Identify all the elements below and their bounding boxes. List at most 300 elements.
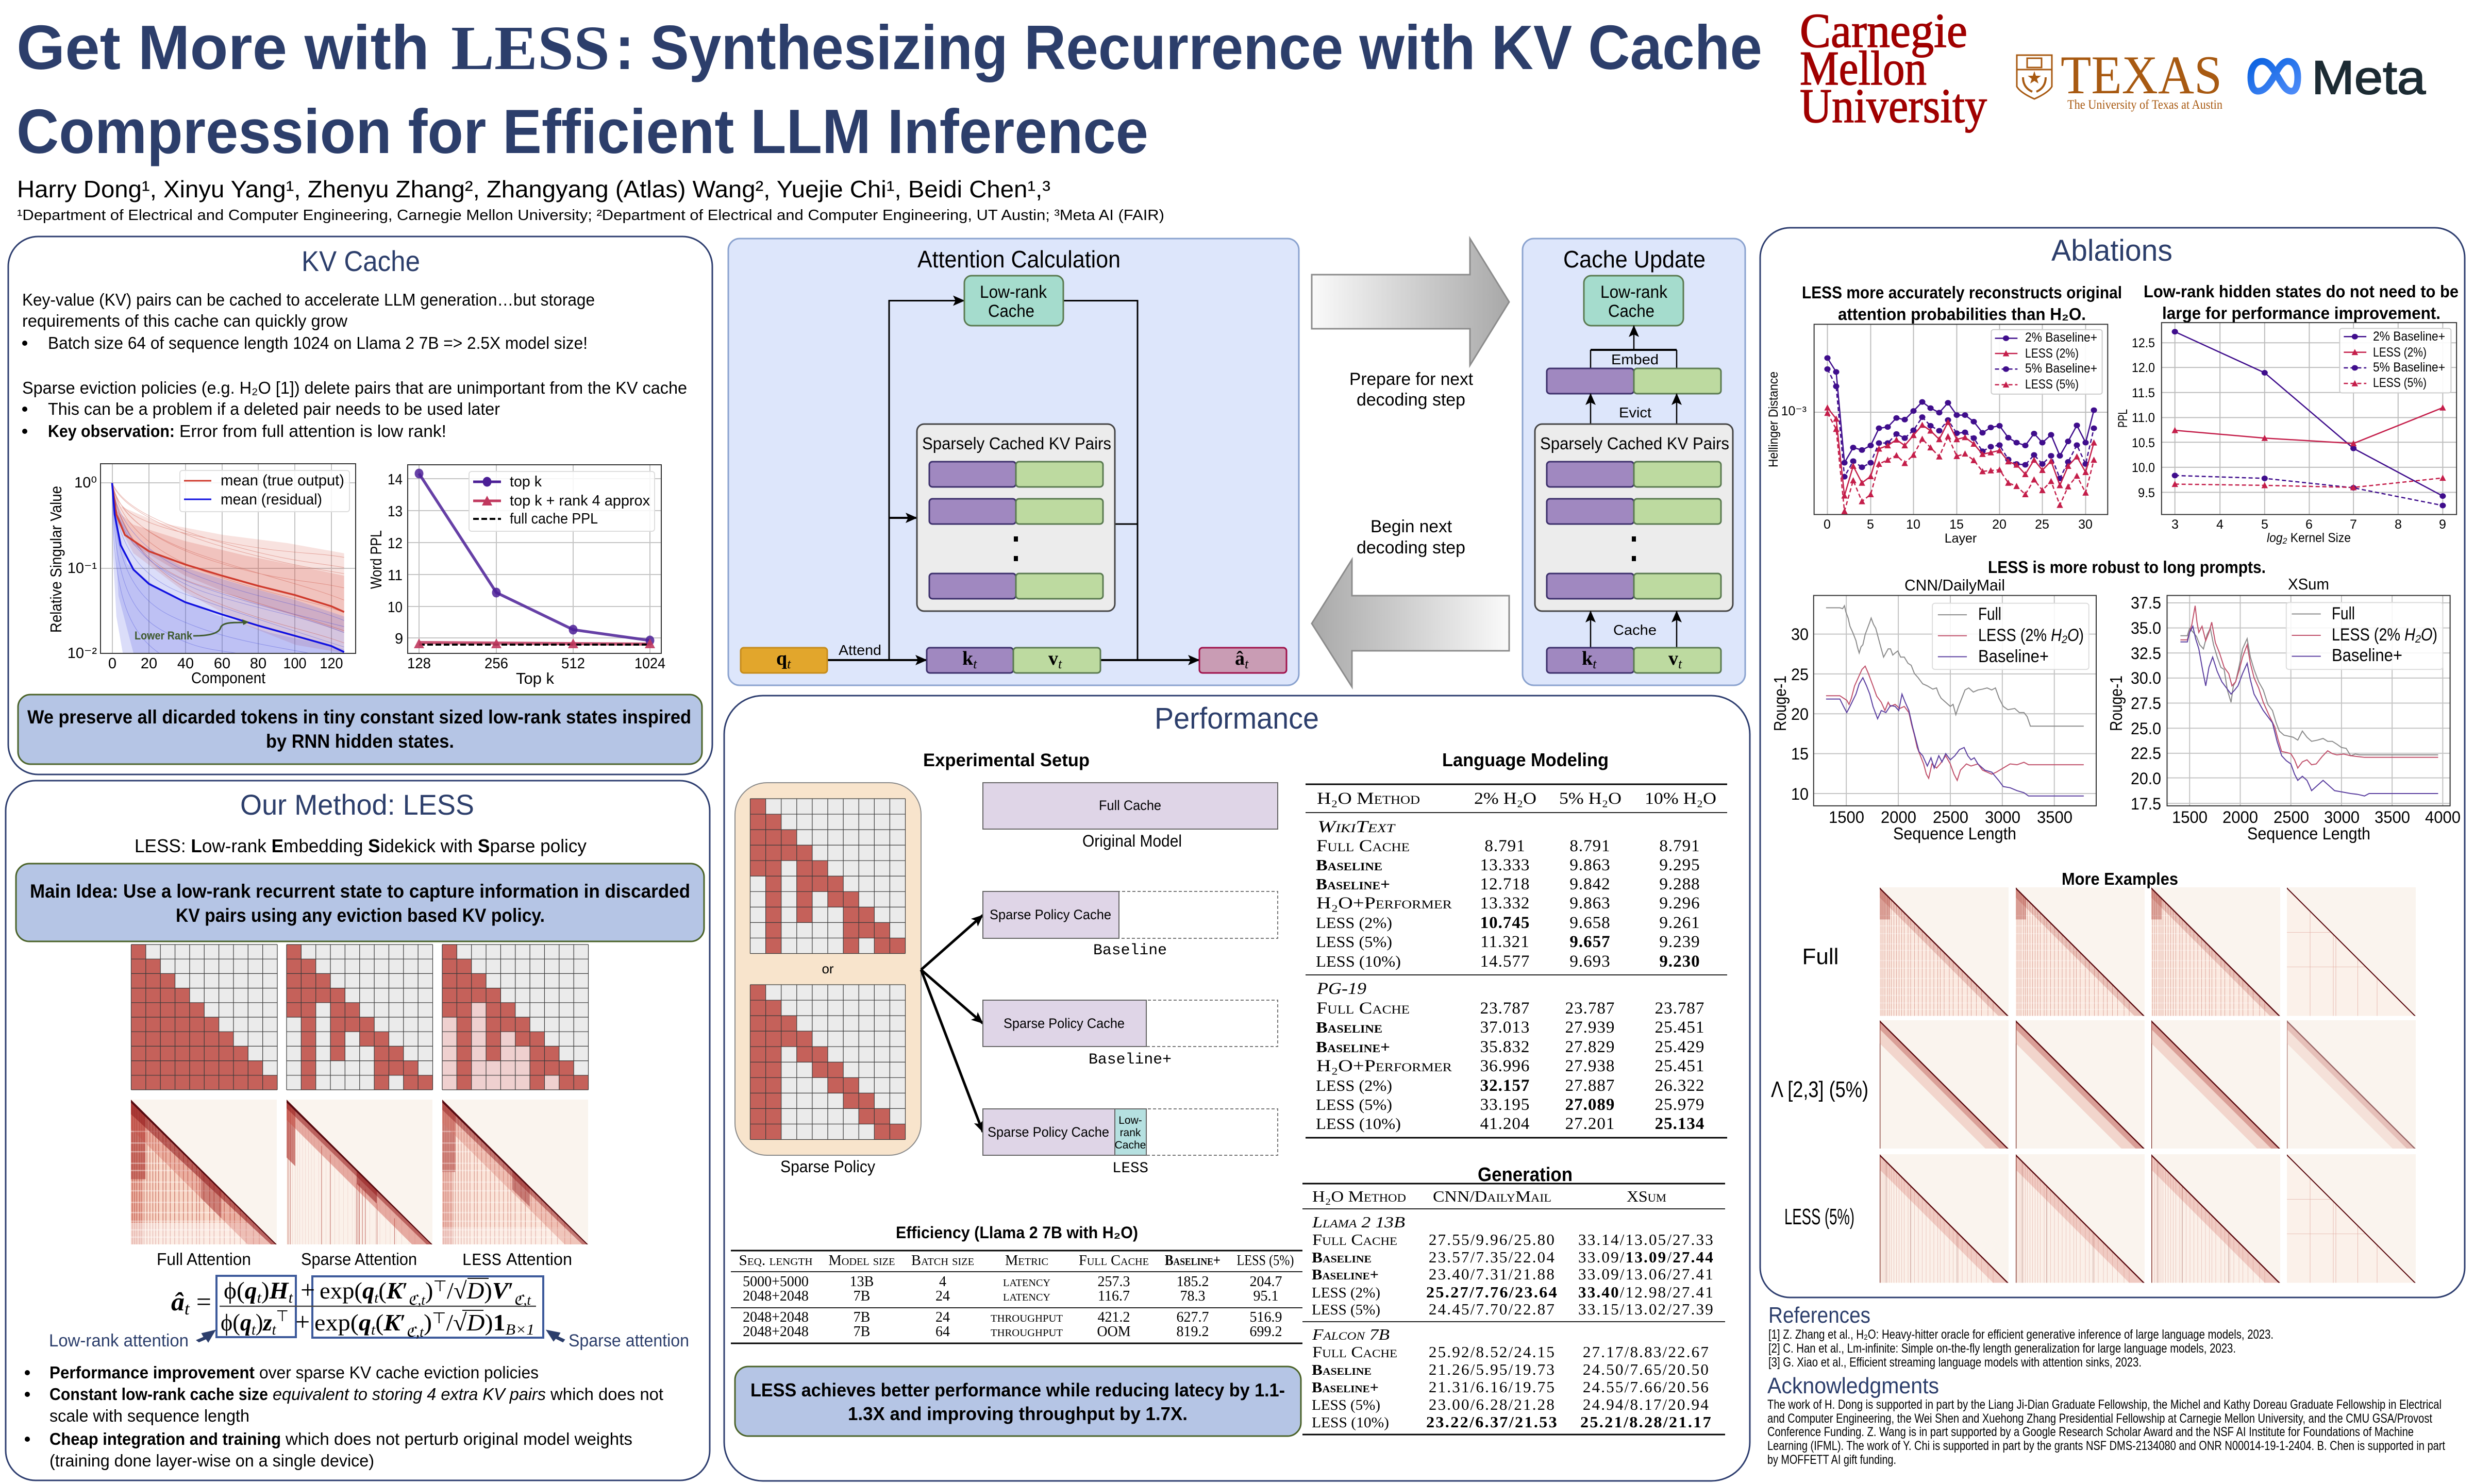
callout: preserve discarded tokens: by RNN hidden states. (266, 731, 454, 752)
table: generation: 27.17/8.83/22.67 (1583, 1343, 1710, 1361)
bullet list: benefits: (training done layer-wise on a single device) (49, 1451, 374, 1470)
table: language modeling: Baseline+ (1316, 1038, 1390, 1056)
equation: t (252, 1321, 256, 1338)
callout: performance summary (735, 1367, 1301, 1436)
box: sparse policy (735, 783, 921, 1176)
table: generation: H₂O Method (1312, 1187, 1406, 1205)
arrows: policy to models (921, 915, 983, 1132)
chart: Hellinger distance by layer: 0 (1824, 517, 1831, 532)
chart: XSum: 3500 (2375, 808, 2410, 827)
chart: Hellinger distance by layer: 10⁻³ (1781, 404, 1807, 418)
equation: K′ (387, 1277, 408, 1304)
chart: XSum: 3000 (2324, 808, 2360, 827)
table: efficiency: 116.7 (1098, 1288, 1130, 1304)
table: generation: 24.55/7.66/20.56 (1583, 1378, 1710, 1396)
table: efficiency: 699.2 (1249, 1324, 1282, 1340)
table: language modeling: 27.829 (1565, 1038, 1615, 1056)
chart: PPL by kernel size: 11.5 (2132, 386, 2155, 400)
table: language modeling: LESS (5%) (1316, 933, 1392, 951)
bar: LESS: Low- (1118, 1115, 1142, 1126)
label: low-rank attention: Low-rank attention (49, 1331, 189, 1351)
bullet list: benefits: over sparse KV cache eviction policies (259, 1363, 539, 1382)
table: efficiency: 2048+2048 (743, 1288, 809, 1304)
references: [2] C. Han et al., Lm-infinite: Simple on-the-fly length generalization for large language models, 2023. (1768, 1341, 2236, 1356)
box: query: t (787, 656, 791, 671)
chart: CNN/DailyMail: Full (1978, 604, 2001, 624)
table: language modeling: H₂O+Performer (1316, 894, 1452, 913)
equation: ℭ,t (513, 1292, 532, 1308)
arrow: prepare for next step: decoding step (1357, 390, 1465, 410)
table: language modeling: 25.979 (1655, 1095, 1704, 1114)
equation: ⊤ (276, 1308, 289, 1325)
subheading: more examples: More Examples (2062, 869, 2178, 888)
table: efficiency: 516.9 (1249, 1309, 1282, 1325)
chart: CNN/DailyMail: Baseline+ (1978, 647, 2049, 666)
box: low-rank cache: Low-rank (1600, 282, 1668, 302)
chart: word PPL: 512 (561, 655, 585, 672)
table: generation (1302, 1164, 1725, 1435)
table: efficiency: 2048+2048 (743, 1324, 809, 1340)
table: language modeling: 32.157 (1480, 1076, 1530, 1095)
equation: K′ (383, 1309, 406, 1336)
evict arrows (1591, 394, 1677, 424)
legend (180, 470, 349, 512)
table: language modeling: 27.201 (1565, 1115, 1615, 1133)
label: sparse attention: Sparse attention (569, 1331, 689, 1351)
acknowledgments (1767, 1373, 2445, 1467)
equation: ℭ,t (406, 1324, 425, 1340)
table: language modeling: 8.791 (1659, 837, 1700, 855)
chart: CNN/DailyMail: 3000 (1985, 808, 2020, 827)
chart: singular values: 20 (141, 655, 157, 672)
table: language modeling: Baseline (1316, 856, 1382, 874)
table: language modeling: 9.239 (1659, 933, 1700, 951)
chart: CNN/DailyMail: 25 (1791, 665, 1809, 684)
box: output: t (1245, 656, 1249, 671)
chart: XSum: 27.5 (2131, 694, 2161, 713)
subheading: reconstruction: attention probabilities than H₂O. (1838, 305, 2086, 324)
bullet list: benefits (25, 1363, 663, 1470)
bar: LESS (983, 1109, 1278, 1177)
equation: + (300, 1275, 315, 1304)
table: language modeling: 13.332 (1480, 894, 1530, 913)
chart: word PPL: 256 (484, 655, 508, 672)
chart: XSum: 35.0 (2131, 619, 2161, 637)
chart: XSum: 4000 (2425, 808, 2461, 827)
table: generation: Full Cache (1312, 1343, 1397, 1361)
table: efficiency: 13B (850, 1274, 874, 1290)
bar: LESS: Sparse Policy Cache (988, 1124, 1109, 1140)
box: key and value (927, 648, 1100, 673)
subheading: experimental setup: Experimental Setup (923, 750, 1090, 770)
table: generation: LESS (5%) (1312, 1302, 1380, 1318)
chart: XSum: Baseline+ (2332, 646, 2402, 665)
annotation: lower rank (135, 619, 249, 642)
heading: Our Method: Our Method: LESS (240, 788, 474, 821)
table: language modeling: PG-19 (1316, 980, 1366, 998)
equation: exp(q (314, 1309, 371, 1336)
chart: XSum: LESS (2% H₂O) (2332, 625, 2437, 645)
table: language modeling: 9.657 (1569, 933, 1611, 951)
table: efficiency: Efficiency (Llama 2 7B with H₂O) (896, 1223, 1138, 1242)
captions: Full Attention (157, 1250, 251, 1269)
bar: baseline plus (983, 1000, 1278, 1069)
chart: CNN/DailyMail: 15 (1791, 745, 1809, 763)
table: efficiency: 64 (935, 1324, 950, 1340)
box: sparse policy: or (822, 961, 834, 976)
table: language modeling: LESS (5%) (1316, 1095, 1392, 1114)
table: efficiency: 2048+2048 (743, 1309, 809, 1325)
chart: word PPL: 10 (388, 599, 403, 616)
table: efficiency: 627.7 (1176, 1309, 1209, 1325)
table: language modeling: 27.089 (1565, 1095, 1615, 1114)
chart: word PPL (367, 465, 665, 687)
chart: word PPL: 11 (388, 567, 403, 584)
subheading: hidden states (2144, 282, 2459, 323)
table: generation: 23.22/6.37/21.53 (1426, 1413, 1558, 1431)
chart: PPL by kernel size: log₂ Kernel Size (2267, 531, 2351, 545)
chart: singular values: 10⁰ (74, 475, 97, 491)
table: generation: 24.50/7.65/20.50 (1583, 1360, 1710, 1378)
equation: D)1 (467, 1309, 505, 1336)
chart: PPL by kernel size: PPL (2116, 409, 2130, 428)
table: efficiency (731, 1223, 1302, 1343)
acknowledgments: by MOFFETT AI gift funding. (1767, 1453, 1896, 1467)
box: query: q (776, 648, 787, 669)
table: efficiency: latency (1003, 1288, 1050, 1304)
panel: Attention Calculation (728, 239, 1299, 685)
chart: singular values: Component (191, 669, 265, 687)
table: language modeling: LESS (10%) (1316, 952, 1401, 970)
box: key and value: v (1668, 648, 1678, 669)
table: generation: 23.57/7.35/22.04 (1429, 1248, 1556, 1266)
chart: Hellinger distance by layer: 5% Baseline+ (2025, 361, 2097, 376)
chart: PPL by kernel size: LESS (5%) (2373, 376, 2427, 390)
table: language modeling: 2% H₂O (1474, 789, 1536, 808)
table: generation: 27.55/9.96/25.80 (1429, 1230, 1556, 1249)
chart: CNN/DailyMail: 2500 (1933, 808, 1968, 827)
row labels: Λ [2,3] (5%) (1771, 1077, 1868, 1102)
equation: ) (425, 1277, 433, 1304)
chart: XSum: 25.0 (2131, 719, 2161, 738)
table: generation: 24.45/7.70/22.87 (1429, 1300, 1556, 1318)
chart: PPL by kernel size: 10.5 (2132, 436, 2155, 450)
chart: PPL by kernel size: 6 (2305, 517, 2313, 532)
table: efficiency: LESS (5%) (1237, 1253, 1294, 1269)
bar: baseline (983, 891, 1278, 959)
table: efficiency: 421.2 (1098, 1309, 1130, 1325)
chart: CNN/DailyMail: 3500 (2037, 808, 2072, 827)
table: efficiency: 5000+5000 (743, 1274, 809, 1290)
table: language modeling: 27.939 (1565, 1018, 1615, 1037)
bar: baseline: Sparse Policy Cache (990, 907, 1111, 922)
box: key and value: t (1593, 656, 1597, 671)
chart: PPL by kernel size: 5% Baseline+ (2373, 360, 2445, 375)
title: Compression for Efficient LLM Inference (16, 96, 1148, 166)
table: efficiency: 7B (854, 1309, 870, 1325)
table: generation: 21.31/6.16/19.75 (1429, 1378, 1556, 1396)
table: generation: 24.94/8.17/20.94 (1583, 1395, 1710, 1413)
embed step (1591, 326, 1677, 368)
chart: CNN/DailyMail: 1500 (1829, 808, 1864, 827)
table: generation: Baseline+ (1312, 1379, 1379, 1396)
table: efficiency: 204.7 (1249, 1274, 1282, 1290)
box: key and value: k (962, 648, 973, 669)
heading: KV Cache: KV Cache (302, 245, 420, 277)
box: low-rank cache: Cache (1608, 301, 1654, 321)
table: language modeling: Baseline+ (1316, 875, 1390, 893)
logo: Meta (2251, 52, 2426, 104)
box: sparsely cached KV pairs: Sparsely Cached KV Pairs (922, 434, 1111, 453)
panel: KV Cache (8, 237, 712, 774)
table: language modeling: H₂O Method (1317, 789, 1420, 808)
chart: PPL by kernel size: 8 (2395, 517, 2402, 532)
chart: PPL by kernel size: 10.0 (2132, 461, 2155, 475)
heading: Performance: Performance (1155, 702, 1319, 735)
legend (469, 471, 655, 531)
equation: t (257, 1289, 262, 1306)
table: generation: 33.15/13.02/27.39 (1578, 1300, 1714, 1318)
logo: University of Texas (2017, 45, 2222, 112)
table: language modeling: 9.296 (1659, 894, 1700, 913)
table: efficiency: 24 (935, 1309, 950, 1325)
table: efficiency: 7B (854, 1324, 870, 1340)
equation: ) (424, 1309, 432, 1336)
bar: LESS: rank (1120, 1127, 1141, 1139)
table: language modeling: 13.333 (1480, 856, 1530, 874)
table: generation: 25.27/7.76/23.64 (1426, 1283, 1558, 1301)
title (16, 12, 1762, 166)
table: language modeling: 25.451 (1655, 1018, 1704, 1037)
table: efficiency: Model size (829, 1253, 895, 1269)
panel: Cache Update (1523, 239, 1745, 685)
table: generation: 23.40/7.31/21.88 (1429, 1265, 1556, 1283)
table: generation: 21.26/5.95/19.73 (1429, 1360, 1556, 1378)
table: efficiency: 78.3 (1180, 1288, 1205, 1304)
text block: KV description: This can be a problem if a deleted pair needs to be used later (48, 399, 500, 418)
bar: LESS: Cache (1115, 1139, 1146, 1151)
table: generation: CNN/DailyMail (1433, 1187, 1551, 1205)
acknowledgments: Acknowledgments (1767, 1373, 1939, 1398)
table: generation: LESS (2%) (1312, 1285, 1380, 1301)
equation: t (185, 1300, 190, 1319)
references (1768, 1303, 2274, 1370)
table: generation: Baseline (1312, 1250, 1372, 1266)
table: language modeling: 9.658 (1569, 914, 1611, 932)
chart: XSum: 22.5 (2131, 744, 2161, 763)
box: low-rank cache (964, 276, 1063, 326)
table: language modeling (1306, 749, 1727, 1138)
box: query (741, 648, 827, 673)
bullet list: benefits: which does not (550, 1385, 663, 1404)
table: language modeling: 11.321 (1480, 933, 1530, 951)
table: language modeling: 26.322 (1655, 1076, 1704, 1095)
bullet list: benefits: scale with sequence length (49, 1406, 249, 1425)
table: language modeling: 27.938 (1565, 1057, 1615, 1075)
table: language modeling: LESS (2%) (1316, 1076, 1392, 1094)
table: generation: 23.00/6.28/21.28 (1429, 1395, 1556, 1413)
chart: singular values: 80 (250, 655, 266, 672)
table: language modeling: 8.791 (1484, 837, 1526, 855)
bullet list: benefits: Constant low-rank cache size (49, 1385, 268, 1404)
chart: singular values: 10⁻¹ (68, 560, 97, 577)
table: language modeling: Full Cache (1316, 837, 1410, 855)
text block: KV description (22, 290, 687, 441)
chart: XSum: 17.5 (2131, 795, 2161, 813)
table: efficiency: Metric (1005, 1253, 1048, 1269)
equation: â (171, 1287, 185, 1316)
evicted pair (1547, 368, 1721, 394)
table: generation: XSum (1627, 1187, 1666, 1205)
equation: z (262, 1309, 272, 1336)
chart: XSum: 32.5 (2131, 644, 2161, 663)
logo: Carnegie Mellon University (1800, 4, 1987, 133)
chart: XSum: Full (2332, 604, 2355, 623)
heading: Cache Update: Cache Update (1563, 246, 1706, 273)
equation: ℭ,t (408, 1292, 426, 1308)
table: efficiency: OOM (1097, 1324, 1131, 1340)
bullet list: benefits: Performance improvement (49, 1363, 255, 1382)
box: key and value: v (1048, 648, 1058, 669)
equation: ) (261, 1277, 270, 1304)
panel: Performance (724, 696, 1750, 1481)
box: sparsely cached KV pairs: Sparsely Cached KV Pairs (1540, 434, 1729, 453)
chart: Hellinger distance by layer: 20 (1992, 517, 2007, 532)
chart: singular values: 0 (108, 655, 116, 672)
chart: PPL by kernel size: 5 (2261, 517, 2268, 532)
equation (171, 1275, 543, 1340)
table: efficiency: Batch size (911, 1253, 974, 1269)
box: output (1199, 648, 1286, 673)
chart: word PPL: Top k (516, 669, 555, 687)
box: low-rank cache: Low-rank (980, 282, 1047, 302)
arrow: prepare for next step: Prepare for next (1349, 369, 1474, 389)
chart: singular values: 60 (214, 655, 230, 672)
chart: CNN/DailyMail: 30 (1791, 625, 1809, 644)
table: language modeling: LESS (2%) (1316, 914, 1392, 932)
table: language modeling: 9.842 (1569, 875, 1611, 893)
table: generation: 33.40/12.98/27.41 (1578, 1283, 1714, 1301)
callout: main idea (16, 864, 704, 941)
bullet list: benefits: equivalent to storing 4 extra KV pairs (273, 1385, 546, 1404)
box: low-rank cache (1584, 276, 1683, 326)
legend: mean (residual) (221, 491, 322, 508)
table: efficiency: 24 (935, 1288, 950, 1304)
chart: Hellinger distance by layer: 15 (1949, 517, 1964, 532)
table: language modeling: 12.718 (1480, 875, 1530, 893)
logo: Carnegie Mellon University: Carnegie (1800, 4, 1967, 58)
callout: main idea: KV pairs using any eviction based KV policy. (176, 905, 545, 926)
table: language modeling: 35.832 (1480, 1038, 1530, 1056)
text block: KV description: requirements of this cache can quickly grow (22, 311, 347, 330)
legend (1932, 603, 2089, 669)
table: efficiency: 185.2 (1176, 1274, 1209, 1290)
table: efficiency: 95.1 (1253, 1288, 1278, 1304)
table: generation: 33.14/13.05/27.33 (1578, 1230, 1714, 1249)
title: LESS (451, 13, 610, 83)
panel: Ablations (1760, 228, 2465, 1297)
subtitle: LESS definition: LESS: Low-rank Embedding Sidekick with Sparse policy (135, 835, 587, 856)
chart: Hellinger distance by layer: 5 (1867, 517, 1874, 532)
table: efficiency: 257.3 (1098, 1274, 1130, 1290)
chart: Hellinger distance by layer: LESS (2%) (2025, 346, 2079, 361)
chart: XSum: 37.5 (2131, 594, 2161, 612)
arrow: begin next step: decoding step (1357, 538, 1465, 558)
table: generation: Falcon 7B (1312, 1325, 1390, 1343)
table: language modeling: 9.863 (1569, 894, 1611, 913)
subheading: reconstruction (1802, 283, 2122, 324)
matrix: sparse attention (287, 945, 433, 1090)
heatmap: LESS attention (442, 1100, 588, 1244)
heading: Ablations: Ablations (2051, 234, 2172, 267)
chart: singular values: 10⁻² (68, 645, 97, 662)
equation: ) (256, 1309, 263, 1336)
chart: CNN/DailyMail: LESS (2% H₂O) (1978, 626, 2084, 645)
heatmap: sparse attention (287, 1100, 432, 1244)
table: language modeling: 33.195 (1480, 1095, 1530, 1114)
table: language modeling: 5% H₂O (1559, 789, 1622, 808)
table: language modeling: 9.230 (1659, 952, 1700, 971)
table: language modeling: WikiText (1317, 818, 1396, 836)
equation: ⊤ (432, 1310, 446, 1327)
equation: ϕ(q (224, 1277, 257, 1304)
table: generation: 25.21/8.28/21.17 (1580, 1413, 1712, 1431)
box: key and value: t (1058, 656, 1062, 671)
chart: CNN/DailyMail: CNN/DailyMail (1904, 576, 2005, 594)
table: language modeling: 37.013 (1480, 1018, 1530, 1037)
chart: CNN/DailyMail: Sequence Length (1893, 824, 2016, 843)
chart: Hellinger distance by layer: LESS (5%) (2025, 377, 2079, 392)
box: key and value (1547, 648, 1721, 673)
captions: Sparse Attention (301, 1250, 417, 1269)
chart: Hellinger distance by layer: 25 (2035, 517, 2049, 532)
arrow: begin next step: Begin next (1370, 517, 1452, 536)
box: sparsely cached KV pairs (917, 424, 1115, 611)
chart: PPL by kernel size: 11.0 (2132, 411, 2155, 425)
callout: preserve discarded tokens: We preserve all dicarded tokens in tiny constant sized low-rank states inspired (27, 706, 691, 728)
equation: /√ (446, 1309, 467, 1336)
chart: Hellinger distance by layer: 30 (2078, 517, 2093, 532)
heatmap grid: more examples (1880, 887, 2416, 1283)
chart: singular values (47, 464, 356, 687)
box: sparsely cached KV pairs (1535, 424, 1733, 611)
table: language modeling: 9.261 (1659, 914, 1700, 932)
text block: KV description: Error from full attention is low rank! (179, 421, 446, 441)
table: generation: Baseline+ (1312, 1267, 1379, 1283)
table: generation: Baseline (1312, 1362, 1372, 1378)
legend: full cache PPL (510, 511, 598, 527)
chart: CNN/DailyMail: 2000 (1881, 808, 1916, 827)
chart: Hellinger distance by layer: 10 (1906, 517, 1920, 532)
chart: CNN/DailyMail: Rouge-1 (1770, 676, 1790, 731)
text block: KV description: Key observation: (48, 421, 175, 441)
equation: + (295, 1307, 310, 1336)
heatmap: full attention (131, 1100, 277, 1244)
chart: word PPL: 13 (388, 503, 403, 520)
table: language modeling: 14.577 (1480, 952, 1530, 971)
table: generation: Generation (1478, 1164, 1573, 1186)
legend: mean (true output) (221, 472, 344, 489)
chart: word PPL: 12 (388, 535, 403, 552)
chart: Hellinger distance by layer: Hellinger Distance (1766, 372, 1781, 467)
callout: performance summary: LESS achieves better performance while reducing latecy by 1.1- (750, 1379, 1285, 1401)
equation: /√ (447, 1277, 467, 1304)
table: efficiency: throughput (991, 1309, 1063, 1325)
table: efficiency: 819.2 (1176, 1324, 1209, 1340)
table: language modeling: 36.996 (1480, 1057, 1530, 1075)
table: language modeling: Baseline (1316, 1018, 1382, 1036)
table: language modeling: 9.693 (1569, 952, 1611, 971)
